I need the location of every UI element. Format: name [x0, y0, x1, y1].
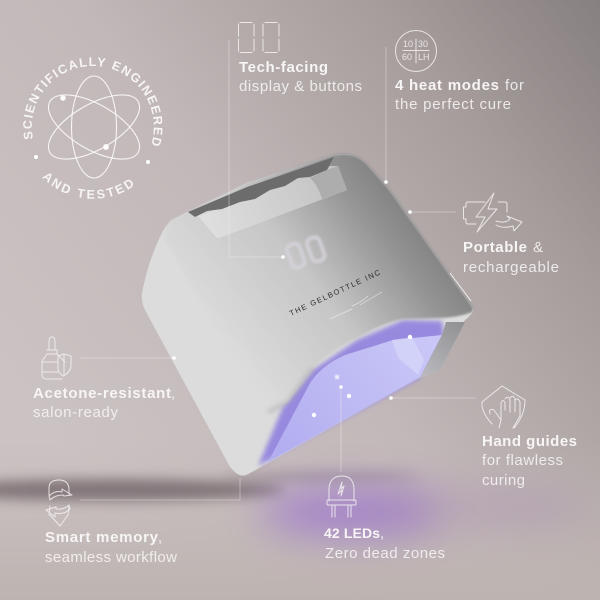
- icon: timer circle: LH: [418, 52, 430, 62]
- handle shoulder: [310, 166, 347, 199]
- feature: heat modes: [395, 30, 524, 113]
- LED dots: [312, 335, 412, 417]
- feature: hand guides: curing: [482, 472, 525, 489]
- rim shade: [268, 368, 313, 412]
- text: LEDs: 42 LEDs: [324, 525, 380, 541]
- UV glow rim: [258, 320, 444, 466]
- handle recess: [198, 166, 347, 238]
- icon: seven-segment display: [238, 22, 279, 52]
- display digits: [286, 236, 326, 269]
- text: portable: Portable: [463, 239, 527, 256]
- feature: tech-facing display: display & buttons: [239, 78, 362, 95]
- text: smart memory: Smart memory: [45, 529, 159, 546]
- feature: LEDs: [324, 476, 445, 562]
- feature: acetone resistant: salon-ready: [33, 404, 118, 421]
- icon: LED bulb: [327, 476, 356, 517]
- text: tech-facing: Tech-facing: [239, 59, 328, 76]
- UV chamber: [268, 335, 442, 462]
- badge text: SCIENTIFICALLY ENGINEERED: [23, 57, 162, 146]
- icon: battery bolt: [464, 193, 522, 232]
- feature: heat modes: the perfect cure: [395, 96, 511, 113]
- text: acetone-resistant: Acetone-resistant: [33, 385, 171, 402]
- text: heat modes: 4 heat modes: [395, 77, 499, 94]
- feature: heat modes: for: [505, 77, 524, 94]
- icon: timer circle: 10: [403, 39, 413, 49]
- edge highlight: [450, 273, 471, 301]
- atom icon: [39, 76, 149, 178]
- feature: portable: [463, 193, 559, 276]
- badge dots: [34, 155, 38, 159]
- feature: hand guides: for flawless: [482, 452, 563, 469]
- chamber highlight: [392, 337, 424, 375]
- icon: timer circle: 30: [418, 39, 428, 49]
- signature: [330, 292, 382, 319]
- right bezel: [420, 322, 465, 378]
- lamp top face: [164, 154, 473, 413]
- feature: hand guides: [482, 386, 577, 489]
- product: UV nail lamp: [142, 154, 474, 476]
- feature: tech-facing display: [238, 22, 362, 95]
- badge: scientifically engineered: AND TESTED: [42, 173, 133, 199]
- text: hand guides: Hand guides: [482, 433, 577, 450]
- feature: portable: rechargeable: [463, 259, 559, 276]
- feature: smart memory: ,: [158, 529, 162, 546]
- feature: acetone resistant: [33, 337, 175, 421]
- feature: portable: &: [533, 239, 543, 256]
- icon: bottle and shield: [42, 337, 71, 379]
- icon: hand: [482, 386, 525, 428]
- feature: LEDs: ,: [380, 525, 384, 542]
- icon: memory head: [46, 480, 72, 526]
- lamp silhouette: [142, 154, 474, 476]
- badge: scientifically engineered: [23, 57, 162, 199]
- feature: acetone resistant: ,: [171, 385, 175, 402]
- feature: LEDs: Zero dead zones: [325, 545, 445, 562]
- icon: timer circle: 60: [402, 52, 412, 62]
- brand text: THE GELBOTTLE INC: [288, 268, 382, 318]
- leader lines: [80, 40, 476, 500]
- icon: timer circle: [396, 30, 436, 72]
- handle opening: [188, 157, 334, 217]
- feature: smart memory: [45, 480, 177, 566]
- feature: smart memory: seamless workflow: [45, 549, 177, 566]
